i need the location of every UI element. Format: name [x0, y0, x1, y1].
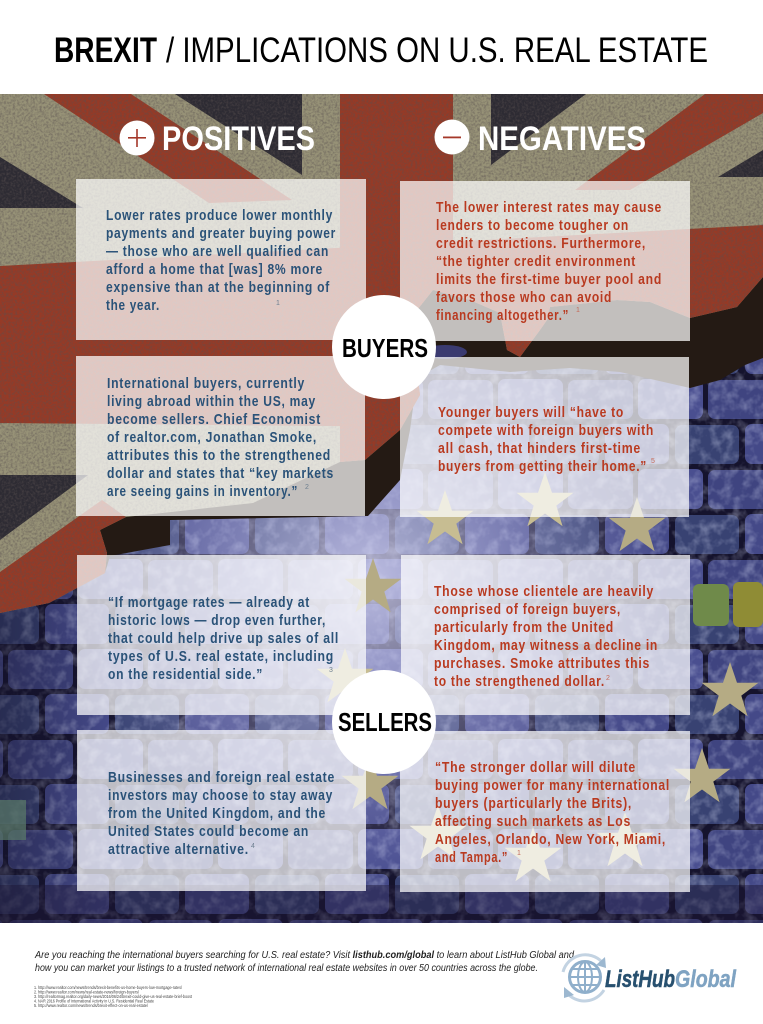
- panel: negatives buyers 1: [400, 181, 690, 341]
- panel: negatives sellers 1: purchases. Smoke attributes this: [434, 655, 650, 672]
- footer call to action: Are you reaching the international buyers searching for U.S. real estate? Visit listhub.com/global to learn about ListHub Global and: [34, 950, 574, 961]
- panel: negatives buyers 1: “the tighter credit environment: [436, 253, 636, 270]
- panel: positives sellers 1: that could help drive up sales of all: [108, 630, 339, 647]
- panel: positives sellers 2: [77, 730, 366, 891]
- badge: buyers: [332, 295, 436, 399]
- logo: ListHub Global: ListHub: [605, 966, 675, 993]
- panel: negatives buyers 1: 1: [576, 307, 580, 314]
- source list: 5. http://www.realtor.com/news/trends/brexit-effect-on-us-real-estate/: [34, 1003, 149, 1008]
- footer call to action: [34, 950, 574, 974]
- heading: negatives: [434, 120, 646, 158]
- panel: negatives buyers 2: compete with foreign buyers with: [438, 422, 654, 439]
- panel: positives buyers 1: expensive than at the beginning of: [106, 279, 330, 296]
- panel: negatives buyers 1: financing altogether.”: [436, 307, 569, 324]
- panel: negatives sellers 2: “The stronger dollar will dilute: [435, 759, 636, 776]
- panel: negatives sellers 1: Kingdom, may witness a decline in: [434, 637, 658, 654]
- title: BREXIT: [54, 31, 157, 70]
- panel: positives buyers 1: payments and greater buying power: [106, 225, 336, 242]
- panel: negatives sellers 1: [401, 555, 690, 715]
- panel: positives buyers 2: [76, 356, 365, 516]
- panel: negatives sellers 2: [400, 731, 690, 892]
- panel: negatives buyers 2: Younger buyers will “have to: [438, 404, 624, 421]
- panel: negatives sellers 2: 1: [517, 850, 521, 857]
- panel: positives buyers 2: dollar and states that “key markets: [107, 465, 334, 482]
- panel: positives buyers 1: afford a home that [was] 8% more: [106, 261, 323, 278]
- panel: positives buyers 2: 2: [305, 484, 309, 491]
- panel: positives buyers 2: International buyers, currently: [107, 375, 305, 392]
- badge: sellers: [332, 670, 436, 774]
- panel: negatives buyers 2: buyers from getting their home.”: [438, 458, 647, 475]
- panel: positives sellers 2: from the United Kingdom, and the: [108, 805, 326, 822]
- panel: negatives sellers 1: particularly from the United: [434, 619, 614, 636]
- panel: negatives buyers 2: all cash, that hinders first-time: [438, 440, 641, 457]
- heading: negatives: NEGATIVES: [478, 120, 646, 158]
- panel: negatives buyers 1: The lower interest rates may cause: [436, 199, 662, 216]
- panel: positives buyers 1: the year.: [106, 297, 160, 314]
- logo: ListHub Global: [563, 955, 737, 1001]
- panel: negatives sellers 1: to the strengthened dollar.: [434, 673, 605, 690]
- panel: positives sellers 2: attractive alternative.: [108, 841, 249, 858]
- panel: positives sellers 2: 4: [251, 843, 255, 850]
- panel: positives sellers 1: types of U.S. real estate, including: [108, 648, 334, 665]
- source list: 4. NAR 2016 Profile of International Activity in U.S. Residential Real Estate: [34, 998, 154, 1004]
- panel: negatives buyers 1: limits the first-time buyer pool and: [436, 271, 662, 288]
- panel: negatives sellers 2: Angeles, Orlando, New York, Miami,: [435, 831, 666, 848]
- panel: negatives buyers 2: [400, 357, 689, 517]
- panel: positives buyers 1: — those who are well qualified can: [106, 243, 329, 260]
- panel: negatives sellers 2: and Tampa.”: [435, 849, 508, 866]
- panel: positives buyers 2: living abroad within the US, may: [107, 393, 316, 410]
- heading: positives: [120, 120, 315, 158]
- panel: positives buyers 2: attributes this to the strengthened: [107, 447, 331, 464]
- heading: positives: POSITIVES: [162, 120, 315, 158]
- panel: positives sellers 2: Businesses and foreign real estate: [108, 769, 335, 786]
- panel: negatives sellers 1: Those whose clientele are heavily: [434, 583, 654, 600]
- logo: ListHub Global: Global: [675, 966, 737, 993]
- panel: positives sellers 1: [77, 555, 366, 715]
- panel: positives buyers 1: Lower rates produce lower monthly: [106, 207, 333, 224]
- panel: positives sellers 1: “If mortgage rates — already at: [108, 594, 310, 611]
- panel: positives sellers 1: historic lows — drop even further,: [108, 612, 326, 629]
- panel: negatives sellers 2: buying power for many international: [435, 777, 670, 794]
- panel: negatives sellers 2: buyers (particularly the Brits),: [435, 795, 632, 812]
- badge: buyers: BUYERS: [342, 333, 428, 363]
- panel: negatives sellers 2: affecting such markets as Los: [435, 813, 631, 830]
- source list: [34, 985, 193, 1008]
- panel: positives buyers 1: 1: [276, 300, 280, 307]
- panel: negatives buyers 1: credit restrictions. Furthermore,: [436, 235, 646, 252]
- panel: positives buyers 2: are seeing gains in inventory.”: [107, 483, 298, 500]
- source list: 1. http://www.realtor.com/news/trends/brexit-benefits-us-home-buyers-low-mortgage-rates/: [34, 985, 183, 990]
- panel: positives sellers 2: United States could become an: [108, 823, 309, 840]
- panel: negatives sellers 1: comprised of foreign buyers,: [434, 601, 621, 618]
- panel: positives sellers 2: investors may choose to stay away: [108, 787, 333, 804]
- footer call to action: how you can market your listings to a trusted network of international real estate websites in over 50 countries across the globe.: [35, 963, 538, 974]
- panel: positives buyers 2: of realtor.com, Jonathan Smoke,: [107, 429, 317, 446]
- panel: negatives sellers 1: 2: [606, 675, 610, 682]
- badge: sellers: SELLERS: [338, 707, 432, 737]
- panel: negatives buyers 1: lenders to become tougher on: [436, 217, 629, 234]
- panel: positives buyers 2: become sellers. Chief Economist: [107, 411, 321, 428]
- panel: negatives buyers 1: favors those who can avoid: [436, 289, 612, 306]
- panel: positives sellers 1: 3: [329, 667, 333, 674]
- panel: positives buyers 1: [76, 179, 366, 340]
- panel: positives sellers 1: on the residential side.”: [108, 666, 263, 683]
- source list: 3. http://realtormag.realtor.org/daily-news/2016/06/24/brexit-could-give-us-real-estate-brief-boost: [34, 994, 193, 999]
- source list: 2. http://www.realtor.com/news/real-estate-news/foreign-buyers/: [34, 990, 140, 994]
- panel: negatives buyers 2: 5: [651, 458, 655, 465]
